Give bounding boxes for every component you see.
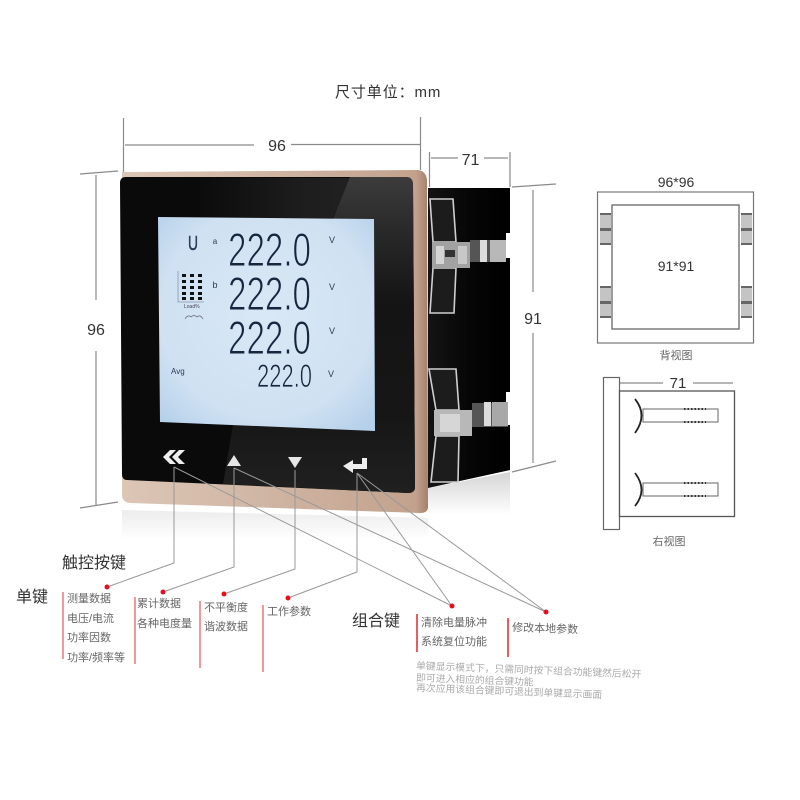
label a: a <box>213 237 218 246</box>
rear view diagram: 96*96 <box>658 174 695 190</box>
gold frame <box>122 170 428 513</box>
unit V labels: V <box>329 282 335 292</box>
reading a: 222.0 <box>228 223 311 276</box>
right view diagram: 右视图 <box>652 534 686 548</box>
upper clip <box>430 199 506 313</box>
lower clip <box>429 369 508 482</box>
callout: key 3 functions <box>200 592 248 668</box>
unit V labels: V <box>329 235 335 245</box>
note text: 即可进入相应的组合键功能 <box>416 671 534 689</box>
dimension: height 96: 96 <box>87 322 105 339</box>
callout: key 1 functions: 功率/频率等 <box>67 650 125 664</box>
heading: combination keys: 组合键 <box>352 612 400 630</box>
callout: key 2 functions <box>135 590 192 664</box>
icon: enter button <box>343 458 367 473</box>
face gloss <box>223 177 415 493</box>
heading: single keys: 单键 <box>16 588 48 606</box>
load bar graph: Load% <box>184 304 200 310</box>
callout: key 3 functions: 不平衡度 <box>204 600 248 614</box>
callout: key 1 functions: 测量数据 <box>67 591 111 605</box>
reading c: 222.0 <box>228 311 311 364</box>
dimension: width 96: 96 <box>268 138 286 155</box>
dimension: rear height 91: 91 <box>524 311 542 328</box>
note text: 单键显示模式下，只需同时按下组合功能键然后松开 <box>416 659 642 681</box>
callout: key 1 functions <box>63 584 125 664</box>
LCD screen <box>158 217 375 431</box>
rear view diagram <box>598 174 754 362</box>
reading average: 222.0 <box>257 358 312 394</box>
unit V labels <box>328 235 335 379</box>
rear reflection <box>428 472 510 515</box>
unit V labels: V <box>329 326 335 336</box>
callout: combination 1: 系统复位功能 <box>421 634 487 648</box>
unit V labels: V <box>328 369 334 379</box>
callout: combination 2 <box>508 610 578 657</box>
black face <box>120 177 415 493</box>
rear view diagram: 91*91 <box>658 258 695 274</box>
reading b: 222.0 <box>228 267 311 320</box>
rear housing <box>428 188 510 488</box>
heading: touch keys: 触控按键 <box>62 554 126 572</box>
callout: key 1 functions: 电压/电流 <box>67 611 114 625</box>
dimension: width 96 <box>124 117 420 172</box>
callout: key 2 functions: 各种电度量 <box>137 616 192 630</box>
callout: key 4 functions: 工作参数 <box>267 604 311 618</box>
callout: key 2 functions: 累计数据 <box>137 596 181 610</box>
right view diagram <box>604 375 734 548</box>
icon: back button <box>163 450 185 464</box>
icon: down button <box>288 457 302 468</box>
dimension: depth 71 <box>430 152 510 187</box>
device side: rear housing and clips <box>428 188 510 515</box>
callout: combination 2: 修改本地参数 <box>512 620 578 636</box>
label b: b <box>212 280 218 290</box>
device reflection <box>122 510 428 540</box>
callout: combination 1: 清除电量脉冲 <box>421 615 487 629</box>
note text: 再次应用该组合键即可退出到单键显示画面 <box>416 681 603 701</box>
right view diagram: 71 <box>670 375 686 392</box>
callout: key 3 functions: 谐波数据 <box>204 619 248 633</box>
dimension: height 96 <box>80 171 118 508</box>
icon: up button <box>227 455 241 466</box>
leader lines from buttons <box>107 467 546 612</box>
note text <box>416 659 642 701</box>
callout: key 4 functions <box>263 596 311 672</box>
rear view diagram: 背视图 <box>660 348 692 362</box>
load bar graph <box>178 271 204 319</box>
callout: key 1 functions: 功率因数 <box>67 630 111 644</box>
face top sheen <box>200 178 350 218</box>
callout: combination 1 <box>417 604 487 652</box>
device front panel <box>120 170 428 513</box>
unit heading: 尺寸单位：mm <box>335 84 441 101</box>
label U: U <box>188 233 198 255</box>
label Avg: Avg <box>171 367 185 376</box>
dimension: rear height 91 <box>512 184 556 472</box>
dimension: depth 71: 71 <box>462 152 480 169</box>
